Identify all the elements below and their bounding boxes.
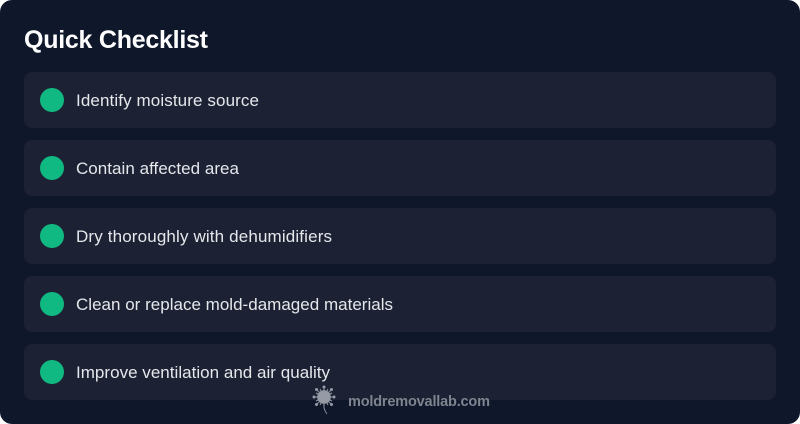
checklist item 2	[24, 140, 776, 196]
icon: green dot 5	[40, 360, 64, 384]
icon: mold spore	[312, 386, 336, 414]
label: item 5: Improve ventilation and air quality	[76, 363, 330, 382]
watermark text: moldremovallab.com	[348, 394, 490, 410]
watermark: moldremovallab.com	[312, 386, 490, 414]
icon: green dot 3	[40, 224, 64, 248]
checklist item 4	[24, 276, 776, 332]
label: item 2: Contain affected area	[76, 159, 240, 178]
checklist item 3	[24, 208, 776, 264]
checklist item 5	[24, 344, 776, 400]
icon: green dot 4	[40, 292, 64, 316]
checklist item 1	[24, 72, 776, 128]
icon: green dot 1	[40, 88, 64, 112]
label: item 1: Identify moisture source	[76, 91, 259, 110]
label: item 4: Clean or replace mold-damaged materials	[76, 295, 393, 314]
label: item 3: Dry thoroughly with dehumidifiers	[76, 227, 332, 246]
heading: Quick Checklist: Quick Checklist	[24, 26, 209, 54]
icon: green dot 2	[40, 156, 64, 180]
